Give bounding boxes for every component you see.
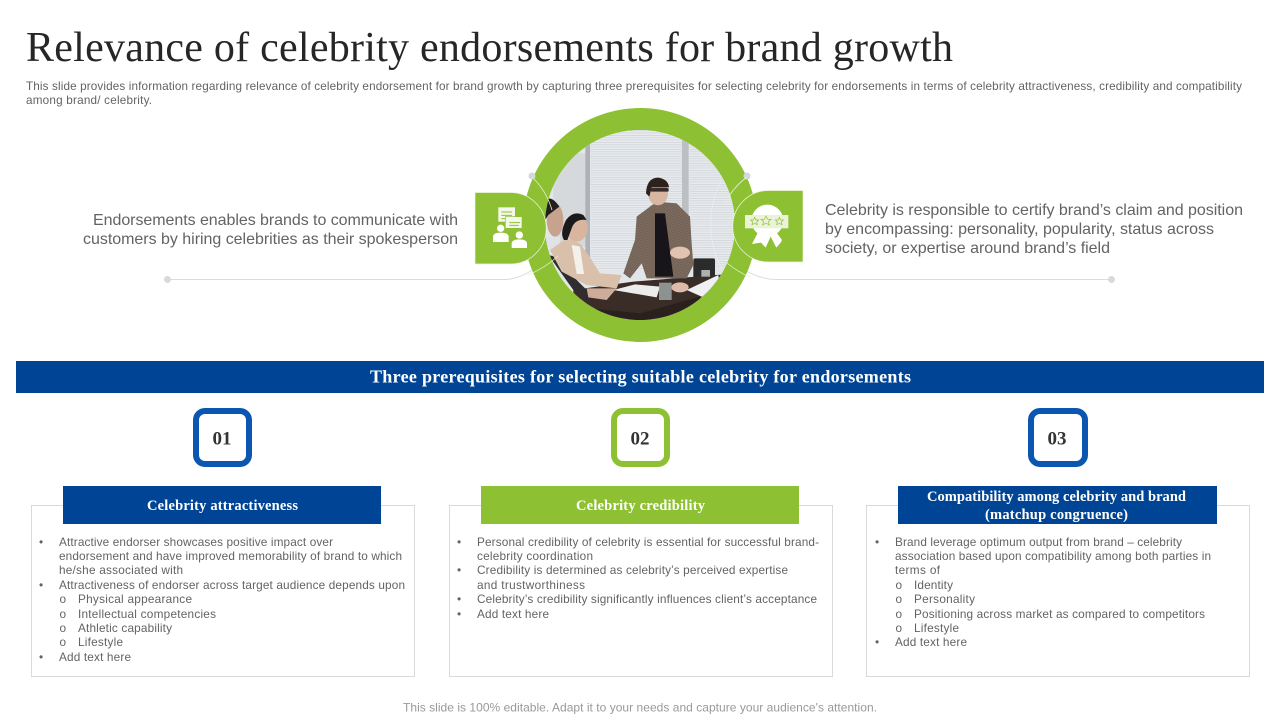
card bullet list: • [457,607,461,621]
number badge 01: 01 [212,428,232,450]
card bullet list: Identity [914,578,953,592]
card bullet list: • [457,563,461,577]
card bullet list: Attractiveness of endorser across target audience depends upon [59,578,405,592]
card header [898,486,1217,524]
card bullet list: Lifestyle [78,635,123,649]
green ring [534,119,746,331]
panel: celebrity credibility [450,411,832,676]
card header: (matchup congruence) [985,507,1128,523]
card bullet list: Personal credibility of celebrity is essential for successful brand- [477,535,819,549]
card bullet list: Personality [914,592,975,606]
number badge 03: 03 [1048,428,1066,450]
card bullet list: celebrity coordination [477,549,593,563]
card bullet list: o [60,621,66,635]
card bullet list: Add text here [477,607,549,621]
panel: compatibility [866,411,1250,676]
right text block: by encompassing: personality, popularity, status across [825,221,1214,238]
card bullet list: • [457,535,461,549]
card outline [450,506,832,676]
icon tile: people talking [475,192,546,264]
card bullet list: Brand leverage optimum output from brand – celebrity [895,535,1182,549]
description text: among brand/ celebrity. [26,94,152,107]
right connector line [733,262,1115,283]
card header [63,486,381,524]
seated woman [550,238,622,288]
card bullet list: Positioning across market as compared to competitors [914,607,1205,621]
left text block: customers by hiring celebrities as their spokesperson [83,231,458,248]
table [573,274,721,320]
card bullet list: Athletic capability [78,621,172,635]
card bullet list: Intellectual competencies [78,607,216,621]
card bullet list: Add text here [895,635,967,649]
thin arcs on the ring [528,177,750,277]
title: Relevance of celebrity endorsements for brand growth [26,25,953,71]
right text block: society, or expertise around brand’s field [825,240,1110,257]
card bullet list: o [896,621,902,635]
number badge 02 [614,411,667,464]
footer note: This slide is 100% editable. Adapt it to your needs and capture your audience's attention. [403,700,877,714]
card header: Celebrity credibility [576,498,706,514]
card outline [32,506,414,676]
left text block [83,212,458,248]
card bullet list: terms of [895,563,941,577]
card bullet list: • [39,535,43,549]
number badge 03 [1031,411,1085,464]
number badge 01 [196,411,249,464]
card bullet list: o [60,635,66,649]
card bullet list: he/she associated with [59,563,183,577]
hands and glasses on table [587,288,617,300]
standing woman [623,202,693,278]
card bullet list: o [896,578,902,592]
icon tile: award ribbon [733,190,803,262]
card bullet list: Add text here [59,650,131,664]
card bullet list: o [896,592,902,606]
card bullet list: Lifestyle [914,621,959,635]
description text: This slide provides information regarding relevance of celebrity endorsement for brand growth by capturing three prerequisites for selecting celebrity for endorsements in terms of celebrity attractiveness, credibility and compatibility [26,80,1242,93]
left connector line [164,258,548,283]
card bullet list [39,535,405,664]
card bullet list: o [896,607,902,621]
ring accent dots [528,172,750,180]
card bullet list: Physical appearance [78,592,192,606]
card bullet list [457,535,819,621]
card bullet list: Attractive endorser showcases positive impact over [59,535,333,549]
card header: Compatibility among celebrity and brand [927,489,1186,505]
right text block [825,202,1243,257]
central photo: business meeting [540,127,740,327]
card header [481,486,799,524]
card bullet list: association based upon compatibility among both parties in [895,549,1211,563]
left text block: Endorsements enables brands to communicate with [93,212,458,229]
card bullet list: • [39,650,43,664]
seated man at left [547,203,563,237]
card bullet list: Celebrity’s credibility significantly influences client’s acceptance [477,592,817,606]
card bullet list [875,535,1211,649]
banner heading [16,361,1264,393]
right text block: Celebrity is responsible to certify brand’s claim and position [825,202,1243,219]
card bullet list: • [457,592,461,606]
number badge 02: 02 [630,428,650,450]
card bullet list: and trustworthiness [477,578,585,592]
card bullet list: • [39,578,43,592]
card bullet list: Credibility is determined as celebrity’s perceived expertise [477,563,788,577]
description text [26,80,1242,107]
card bullet list: • [875,535,879,549]
banner heading: Three prerequisites for selecting suitable celebrity for endorsements [370,366,911,386]
card bullet list: • [875,635,879,649]
panel: celebrity attractiveness [32,411,414,676]
card bullet list: o [60,592,66,606]
card outline [866,506,1250,676]
card header: Celebrity attractiveness [147,498,298,514]
card bullet list: o [60,607,66,621]
card bullet list: endorsement and have improved memorability of brand to which [59,549,402,563]
chair [693,258,715,277]
